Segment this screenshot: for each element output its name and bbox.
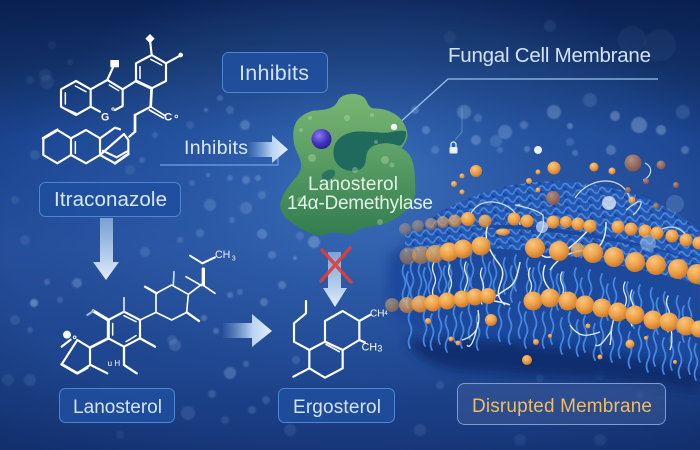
icon: itraconazole molecule: G (101, 111, 109, 123)
icon: itraconazole molecule (43, 34, 183, 163)
box: Inhibits: Inhibits (239, 61, 309, 85)
icon: ergosterol molecule (293, 301, 388, 378)
icon: lanosterol molecule: 3 (232, 253, 236, 262)
icon: ergosterol molecule: 4 (384, 311, 388, 317)
enzyme blob (280, 94, 415, 236)
membrane dark body (388, 190, 700, 372)
arrow: itraconazole down (93, 218, 119, 280)
box: Inhibits (222, 52, 328, 92)
membrane lower shadow (405, 339, 700, 392)
upper lipid mesh (405, 181, 700, 262)
square atom (110, 60, 119, 67)
lipid band between top and middle rows (405, 227, 700, 285)
icon: lanosterol molecule (62, 249, 236, 373)
panel: cell membrane (385, 146, 700, 392)
white dot (391, 124, 397, 130)
box: Itraconazole: Itraconazole (54, 188, 167, 211)
enzyme pocket (333, 131, 406, 171)
icon: lanosterol molecule: u H (108, 359, 120, 368)
arrow: Inhibits to enzyme (160, 135, 288, 165)
middle phospholipid heads (400, 236, 700, 284)
upper phospholipid heads (399, 212, 700, 250)
enzyme: Lanosterol 14-alpha-Demethylase: 14α-Demethylase (287, 193, 433, 214)
box: Lanosterol: Lanosterol (73, 397, 162, 418)
upper row tails (402, 252, 692, 342)
callout: Fungal Cell Membrane (397, 44, 658, 125)
arrow: Inhibits to enzyme: Inhibits (184, 137, 248, 159)
enzyme: Lanosterol 14-alpha-Demethylase (280, 94, 433, 241)
enzyme shadow (300, 240, 372, 242)
icon: itraconazole molecule: C (164, 112, 172, 124)
box: Disrupted Membrane: Disrupted Membrane (472, 396, 652, 417)
lower row tails (408, 302, 698, 380)
enzyme small pocket (322, 170, 335, 181)
lower phospholipid heads (385, 288, 700, 338)
box: Disrupted Membrane (458, 384, 666, 424)
box: Ergosterol (278, 388, 394, 422)
icon: ergosterol molecule: 3 (377, 343, 382, 353)
enzyme highlights (297, 113, 394, 225)
white disrupted tails (432, 163, 690, 350)
arrow: enzyme down to ergosterol (323, 252, 347, 307)
box: Ergosterol: Ergosterol (293, 397, 381, 418)
icon: red X block (321, 248, 351, 282)
free floating particles (425, 146, 684, 365)
box: Itraconazole (40, 182, 180, 216)
callout: Fungal Cell Membrane: Fungal Cell Membrane (448, 44, 651, 67)
blue sphere (312, 129, 332, 149)
arrow: lanosterol to ergosterol (223, 314, 272, 347)
diamond atom (145, 34, 155, 43)
icon: ergosterol molecule: CH (370, 308, 384, 319)
icon: lanosterol molecule: CH (215, 249, 230, 261)
box: Lanosterol (60, 388, 174, 422)
icon: padlock (450, 108, 462, 154)
icon: ergosterol molecule: CH (362, 341, 377, 353)
enzyme label: Lanosterol (308, 174, 398, 195)
